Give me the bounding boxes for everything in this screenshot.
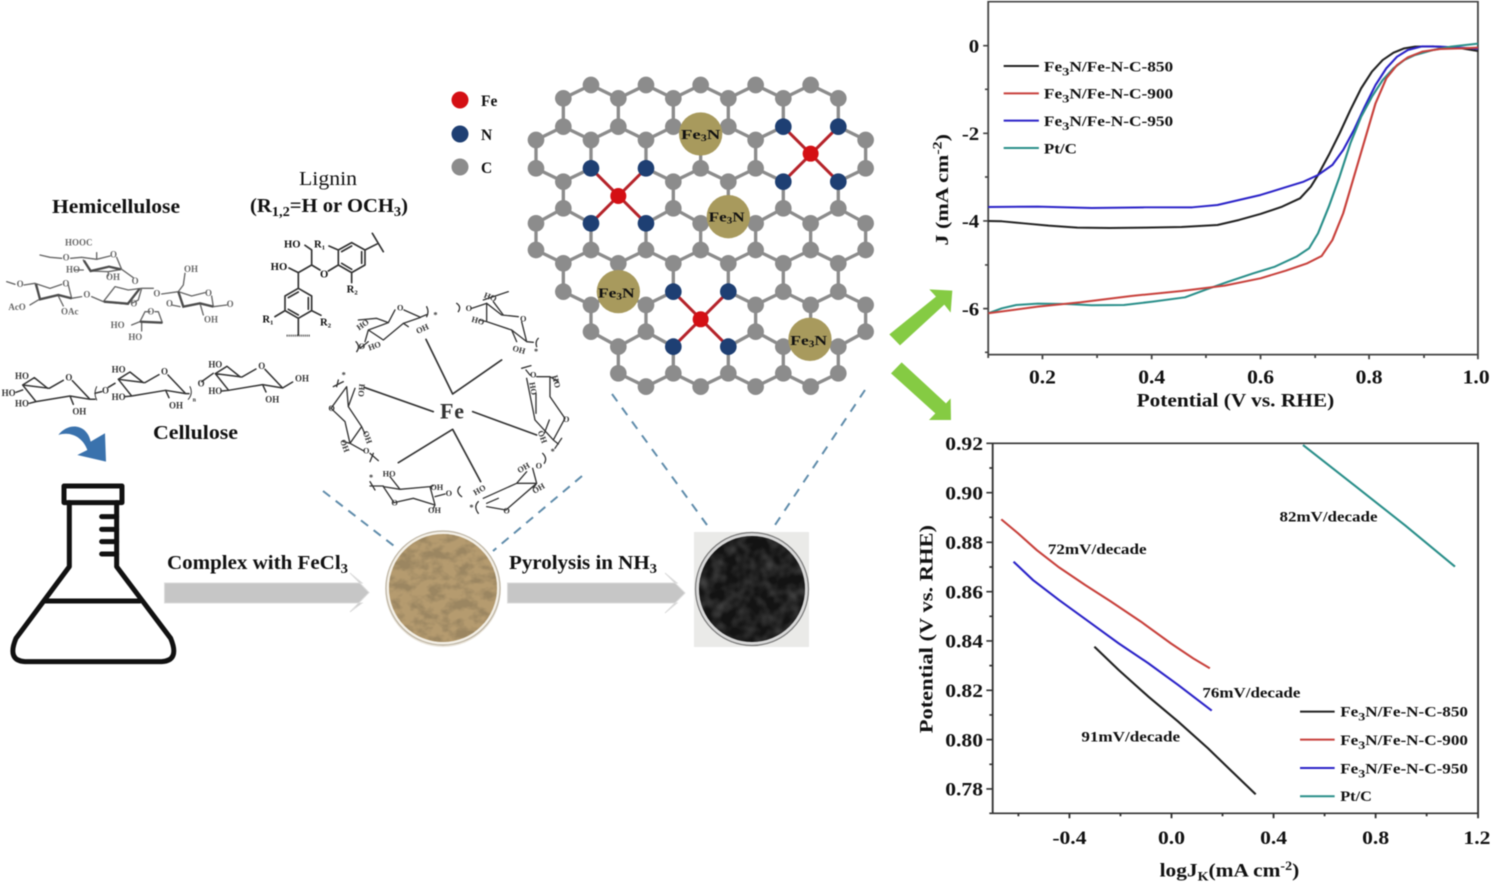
legend: N/Fe-N-C-950 bbox=[1365, 761, 1468, 777]
y tick labels: -2 bbox=[962, 124, 979, 145]
heading: Lignin bbox=[250, 168, 408, 220]
Fe3N particle: 3 bbox=[809, 339, 815, 349]
axes bbox=[986, 443, 1478, 818]
legend: 3 bbox=[1062, 92, 1069, 106]
y tick labels: 0.86 bbox=[945, 582, 983, 603]
Fe3N particle: Fe bbox=[790, 334, 805, 349]
chemical structure: hemicellulose: O bbox=[153, 289, 160, 299]
Fe3N particle bbox=[597, 270, 640, 313]
chemical structure: hemicellulose bbox=[7, 237, 234, 342]
carbon atoms bbox=[536, 85, 866, 387]
arrow: green to Tafel chart bbox=[891, 362, 951, 420]
chemical structure: hemicellulose: O bbox=[166, 299, 173, 309]
photo: brown biomass complex powder bbox=[385, 531, 501, 647]
sugar units: O bbox=[359, 342, 366, 351]
y axis title: ) bbox=[932, 134, 952, 141]
chemical structure: Fe-coordinated ring bbox=[328, 291, 570, 515]
heading: Lignin: 3 bbox=[394, 205, 401, 220]
sugar units: O bbox=[530, 371, 537, 380]
slope annotation: 91mV/decade bbox=[1081, 729, 1180, 745]
x axis title: Potential (V vs. RHE) bbox=[1137, 390, 1334, 411]
x tick labels: 0.4 bbox=[1138, 366, 1165, 388]
sugar units: HO bbox=[527, 381, 539, 396]
y tick labels: 0 bbox=[969, 36, 979, 57]
chemical structure: cellulose: OH bbox=[72, 407, 86, 417]
Fe3N particle: 3 bbox=[727, 216, 733, 226]
y tick labels: 0.82 bbox=[945, 681, 983, 702]
sugar units: OH bbox=[516, 461, 532, 475]
Fe3N particle: Fe bbox=[681, 128, 696, 143]
sugar units: OH bbox=[338, 438, 351, 454]
legend: atom types bbox=[452, 92, 497, 177]
x axis title: logJ bbox=[1160, 861, 1198, 881]
Fe-N bonds bbox=[591, 127, 838, 347]
Fe3N particle: Fe bbox=[598, 286, 613, 301]
legend: 3 bbox=[1062, 65, 1069, 78]
sugar units: OH bbox=[415, 322, 431, 336]
sugar units: HO bbox=[383, 469, 396, 478]
chemical structure: hemicellulose: HO bbox=[111, 320, 125, 330]
Fe3N particle bbox=[788, 318, 832, 361]
chemical structure: hemicellulose: O bbox=[132, 276, 139, 286]
legend: Fe bbox=[1340, 704, 1358, 720]
sugar units: OH bbox=[531, 481, 547, 496]
y tick labels: 0.90 bbox=[945, 483, 983, 504]
chart: LSV polarisation curves bbox=[930, 2, 1490, 411]
chemical structure: cellulose: OH bbox=[265, 394, 279, 404]
x tick labels: 0.6 bbox=[1247, 366, 1274, 388]
sugar units: HO bbox=[472, 483, 488, 497]
label: Complex with FeCl3: Complex with FeCl bbox=[167, 552, 333, 574]
heading: Lignin: ) bbox=[401, 195, 408, 217]
x tick labels bbox=[1052, 828, 1490, 849]
x tick labels: 0.2 bbox=[1029, 366, 1056, 388]
Fe3N particle: N bbox=[622, 286, 635, 301]
chemical structure: lignin: 2 bbox=[354, 290, 358, 297]
chemical structure: cellulose: HO bbox=[15, 399, 29, 409]
sugar units: OH bbox=[511, 344, 527, 356]
chemical structure: hemicellulose: HO bbox=[66, 265, 80, 275]
chemical structure: lignin: 1 bbox=[270, 319, 273, 326]
x tick labels bbox=[1029, 366, 1490, 388]
legend: 3 bbox=[1062, 119, 1069, 133]
curve: Fe3N/Fe-N-C-850 bbox=[988, 46, 1478, 228]
y tick labels: 0.92 bbox=[945, 434, 983, 455]
sugar units: * bbox=[469, 503, 473, 512]
chemical structure: cellulose: O bbox=[65, 373, 72, 383]
heading: Lignin: Lignin bbox=[299, 168, 357, 190]
chemical structure: hemicellulose: O bbox=[227, 299, 234, 309]
heading: Hemicellulose: Hemicellulose bbox=[52, 196, 180, 218]
y tick labels bbox=[945, 434, 983, 800]
legend: atom types: C bbox=[481, 160, 492, 177]
legend: Fe bbox=[1340, 761, 1358, 777]
x axis title: K bbox=[1198, 869, 1209, 883]
sugar units: HO bbox=[470, 315, 486, 327]
Fe3N particle: Fe bbox=[709, 211, 723, 226]
sugar units: OH bbox=[428, 506, 441, 515]
chemical structure: cellulose: HO bbox=[208, 359, 222, 369]
coordination lines bbox=[364, 339, 537, 482]
legend: 3 bbox=[1358, 739, 1365, 752]
chemical structure: hemicellulose: OH bbox=[106, 272, 120, 282]
Fe3N particle bbox=[679, 112, 722, 156]
sugar units: HO bbox=[367, 339, 383, 353]
chemical structure: lignin: 2 bbox=[328, 323, 332, 330]
dashed projection lines: complex bbox=[323, 476, 582, 551]
diagram: Fe-N4 doped graphene lattice with Fe3N particles bbox=[536, 85, 866, 387]
sugar units: * bbox=[342, 371, 346, 380]
curve: Fe3N/Fe-N-C-900 bbox=[988, 48, 1478, 313]
chemical structure: lignin: R bbox=[347, 285, 354, 296]
legend: N/Fe-N-C-900 bbox=[1069, 87, 1173, 103]
legend: Fe bbox=[1044, 87, 1060, 103]
legend: Fe bbox=[1044, 114, 1060, 130]
sugar units: OH bbox=[430, 483, 444, 492]
chemical structure: hemicellulose: O bbox=[83, 289, 90, 299]
chemical structure: cellulose: HO bbox=[15, 371, 29, 381]
sugar units: HO bbox=[550, 374, 562, 390]
legend: Pt/C bbox=[1044, 142, 1077, 157]
chemical structure: cellulose: O bbox=[198, 379, 205, 389]
slope annotation: 82mV/decade bbox=[1280, 509, 1378, 525]
y tick labels: 0.84 bbox=[945, 632, 983, 652]
sugar units: HO bbox=[355, 317, 371, 332]
y tick labels: -4 bbox=[962, 211, 979, 232]
heading: Lignin: =H or OCH bbox=[290, 195, 394, 217]
dashed projection lines: lattice bbox=[612, 390, 865, 525]
legend bbox=[1004, 60, 1173, 157]
legend: N/Fe-N-C-850 bbox=[1069, 60, 1173, 75]
legend: atom types: N bbox=[481, 127, 492, 144]
legend: 3 bbox=[1358, 710, 1365, 723]
chemical structure: lignin: R bbox=[314, 239, 322, 250]
chemical structure: hemicellulose: O bbox=[62, 279, 69, 289]
chemical structure: cellulose: HO bbox=[208, 386, 222, 396]
Fe3N particle: 3 bbox=[701, 133, 707, 143]
chart: Tafel plot bbox=[915, 434, 1490, 883]
slope annotation: 72mV/decade bbox=[1048, 542, 1147, 558]
heading: Lignin: 1,2 bbox=[272, 205, 290, 220]
chemical structure: hemicellulose: O bbox=[63, 253, 70, 263]
sugar units: O bbox=[503, 506, 510, 515]
sugar units: HO bbox=[356, 383, 366, 398]
label: Pyrolysis in NH3: 3 bbox=[650, 562, 657, 577]
legend: 3 bbox=[1358, 767, 1365, 780]
chemical structure: hemicellulose: HOOC bbox=[65, 237, 92, 247]
nitrogen atoms bbox=[591, 127, 838, 347]
heading: Cellulose: Cellulose bbox=[153, 422, 238, 444]
label: Fe centre: Fe bbox=[440, 399, 464, 424]
carbon bonds bbox=[536, 85, 866, 387]
legend: Fe bbox=[1044, 60, 1060, 75]
chemical structure: hemicellulose: OAc bbox=[61, 306, 78, 316]
chemical structure: cellulose: OH bbox=[295, 374, 309, 384]
chemical structure: lignin: HO bbox=[284, 239, 301, 250]
y axis title: J (mA cm bbox=[932, 177, 952, 246]
chemical structure: cellulose: O bbox=[161, 367, 168, 377]
sugar units: O bbox=[391, 498, 398, 507]
Fe3N particle: N bbox=[732, 211, 745, 226]
y tick labels: -6 bbox=[962, 299, 979, 320]
sugar units: OH bbox=[361, 430, 374, 445]
line: Fe3N/Fe-N-C-900 bbox=[1001, 519, 1210, 668]
sugar units bbox=[328, 291, 570, 515]
x tick labels: 0.4 bbox=[1260, 828, 1287, 849]
sugar units: * bbox=[534, 347, 538, 356]
label: Complex with FeCl3: 3 bbox=[341, 562, 348, 577]
sugar units: OH bbox=[536, 429, 549, 445]
sugar units: O bbox=[446, 489, 453, 498]
chemical structure: lignin bbox=[262, 233, 383, 336]
chemical structure: hemicellulose: O bbox=[130, 299, 137, 309]
y tick labels: 0.78 bbox=[945, 780, 983, 800]
x axis title: -2 bbox=[1280, 859, 1292, 873]
y tick labels: 0.88 bbox=[945, 533, 983, 554]
chemical structure: hemicellulose: O bbox=[205, 288, 212, 298]
chemical structure: cellulose: HO bbox=[2, 388, 16, 398]
chemical structure: cellulose: OH bbox=[169, 400, 183, 410]
y tick labels bbox=[962, 36, 979, 320]
legend: N/Fe-N-C-850 bbox=[1365, 704, 1468, 720]
line: Fe3N/Fe-N-C-850 bbox=[1094, 647, 1256, 794]
x tick labels: 0.8 bbox=[1356, 366, 1383, 388]
label: Pyrolysis in NH3: Pyrolysis in NH bbox=[509, 552, 643, 574]
x axis title: (mA cm bbox=[1209, 861, 1280, 881]
x tick labels: 0.8 bbox=[1362, 828, 1389, 849]
chemical structure: hemicellulose: OH bbox=[184, 264, 198, 274]
chemical structure: hemicellulose: O bbox=[17, 279, 24, 289]
chemical structure: cellulose: HO bbox=[112, 365, 126, 375]
arrow: pyrolysis step bbox=[508, 573, 685, 613]
sugar units: O bbox=[520, 314, 527, 323]
chemical structure: lignin: O bbox=[320, 269, 328, 280]
x tick labels: 1.2 bbox=[1463, 828, 1490, 849]
iron atoms bbox=[610, 146, 819, 327]
chemical structure: lignin: 1 bbox=[322, 244, 325, 251]
Fe3N particle: N bbox=[707, 128, 720, 143]
Fe3N particle: 3 bbox=[616, 291, 623, 301]
x tick labels: 0.0 bbox=[1158, 828, 1185, 849]
sugar units: O bbox=[328, 404, 335, 413]
x tick labels: -0.4 bbox=[1052, 828, 1087, 849]
sugar units: * bbox=[369, 473, 373, 482]
chemical structure: hemicellulose: HO bbox=[128, 332, 142, 342]
sugar units: * bbox=[551, 447, 555, 456]
sugar units: * bbox=[433, 311, 437, 320]
chemical structure: cellulose bbox=[2, 359, 309, 417]
x axis title: ) bbox=[1292, 861, 1299, 881]
chemical structure: cellulose: HO bbox=[112, 392, 126, 402]
chemical structure: lignin: R bbox=[262, 314, 270, 325]
chemical structure: cellulose: O bbox=[102, 385, 109, 395]
heading: Lignin: (R bbox=[250, 195, 271, 217]
arrow: complex step bbox=[164, 573, 369, 612]
legend bbox=[1300, 704, 1468, 805]
chemical structure: cellulose: O bbox=[258, 361, 265, 371]
y tick labels: 0.80 bbox=[945, 730, 983, 751]
chemical structure: lignin: HO bbox=[271, 262, 287, 273]
chemical structure: cellulose: n bbox=[193, 398, 197, 404]
line: Fe3N/Fe-N-C-950 bbox=[1014, 562, 1212, 711]
Fe3N particle bbox=[707, 195, 750, 238]
sugar units: O bbox=[363, 446, 370, 455]
legend: atom types: Fe bbox=[481, 93, 497, 110]
icon: flask bbox=[13, 486, 174, 662]
legend: N/Fe-N-C-950 bbox=[1069, 114, 1173, 130]
chemical structure: hemicellulose: OH bbox=[204, 315, 218, 325]
slope annotation: 76mV/decade bbox=[1202, 685, 1300, 701]
axes bbox=[983, 2, 1478, 359]
photo: black pyrolysed catalyst powder bbox=[694, 532, 809, 647]
sugar units: HO bbox=[483, 291, 498, 304]
chemical structure: hemicellulose: O bbox=[147, 307, 154, 317]
chemical structure: hemicellulose: O bbox=[110, 249, 117, 259]
sugar units: O bbox=[397, 303, 404, 312]
x tick labels: 1.0 bbox=[1463, 366, 1490, 388]
legend: Pt/C bbox=[1340, 789, 1372, 805]
sugar units: O bbox=[466, 304, 473, 313]
y axis title: Potential (V vs. RHE) bbox=[915, 525, 937, 733]
legend: N/Fe-N-C-900 bbox=[1365, 733, 1468, 749]
chemical structure: lignin: R bbox=[320, 318, 328, 329]
sugar units: O bbox=[536, 461, 543, 470]
icon: blue curved arrow bbox=[58, 426, 106, 462]
arrow: green to polarisation chart bbox=[889, 289, 952, 345]
curve: Fe3N/Fe-N-C-950 bbox=[988, 46, 1478, 208]
curve: Pt/C bbox=[988, 44, 1478, 313]
sugar units: O bbox=[563, 415, 570, 424]
legend: Fe bbox=[1340, 733, 1358, 749]
Fe3N particle: N bbox=[814, 334, 827, 349]
chemical structure: hemicellulose: AcO bbox=[8, 302, 26, 312]
line: Pt/C bbox=[1303, 445, 1455, 567]
y axis title: -2 bbox=[930, 141, 945, 155]
